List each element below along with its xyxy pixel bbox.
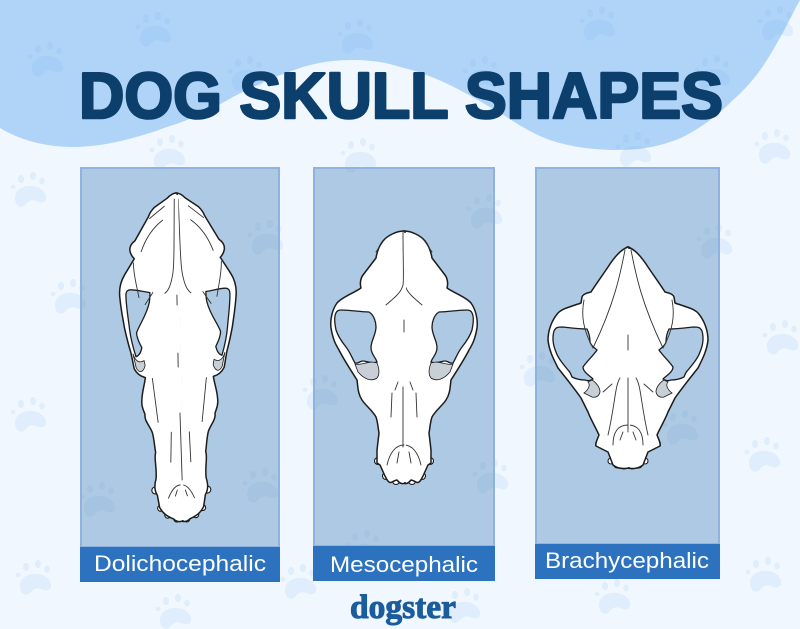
skull: mesocephalic bbox=[331, 231, 477, 484]
panel background bbox=[536, 168, 719, 544]
label: brachycephalic: Brachycephalic bbox=[545, 548, 709, 573]
label: dolichocephalic: Dolichocephalic bbox=[94, 551, 266, 576]
logo: dogster: dogster bbox=[350, 589, 456, 626]
panel: brachycephalic bbox=[535, 168, 720, 579]
skull: dolichocephalic bbox=[118, 192, 240, 523]
title: DOG SKULL SHAPES bbox=[79, 59, 723, 132]
label: dolichocephalic bbox=[80, 547, 280, 582]
skull: brachycephalic bbox=[548, 247, 708, 469]
label: brachycephalic bbox=[535, 544, 720, 579]
label: mesocephalic bbox=[313, 546, 495, 581]
panel: mesocephalic bbox=[313, 168, 495, 581]
panel background bbox=[81, 168, 279, 547]
header wave bbox=[0, 0, 800, 150]
panel background bbox=[314, 168, 494, 546]
label: mesocephalic: Mesocephalic bbox=[330, 552, 478, 577]
panel: dolichocephalic bbox=[80, 168, 280, 582]
